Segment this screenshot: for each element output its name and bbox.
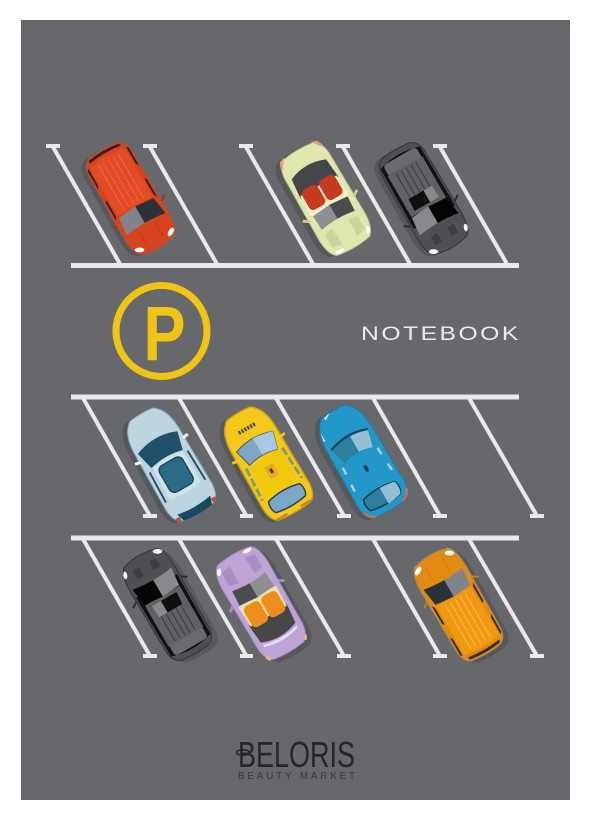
car: orange SUV bbox=[403, 540, 515, 669]
car: lilac convertible bbox=[206, 539, 318, 668]
car: light blue sedan bbox=[113, 399, 225, 529]
car: dark grey SUV, bottom row bbox=[112, 540, 224, 669]
car: pale green convertible bbox=[269, 134, 381, 263]
title: NOTEBOOK: NOTEBOOK bbox=[361, 323, 519, 344]
logo: Beloris Beauty Market: BELORIS bbox=[238, 734, 355, 775]
orange seats bbox=[242, 589, 287, 629]
logo: Beloris Beauty Market bbox=[236, 734, 355, 782]
icon: parking sign bbox=[116, 286, 207, 377]
car: yellow taxi bbox=[210, 398, 322, 527]
icon: parking sign: P bbox=[144, 291, 186, 377]
red seats bbox=[300, 173, 344, 212]
car: blue sedan bbox=[305, 398, 413, 525]
parking lines: top row bbox=[46, 146, 519, 266]
parking lines: bottom row bbox=[71, 538, 544, 656]
logo: Beloris Beauty Market: BEAUTY MARKET bbox=[238, 771, 355, 782]
checker stripe bbox=[239, 424, 255, 433]
parking lines: middle row bbox=[71, 397, 544, 516]
car: red SUV bbox=[75, 134, 186, 263]
car: dark grey SUV bbox=[368, 134, 479, 263]
